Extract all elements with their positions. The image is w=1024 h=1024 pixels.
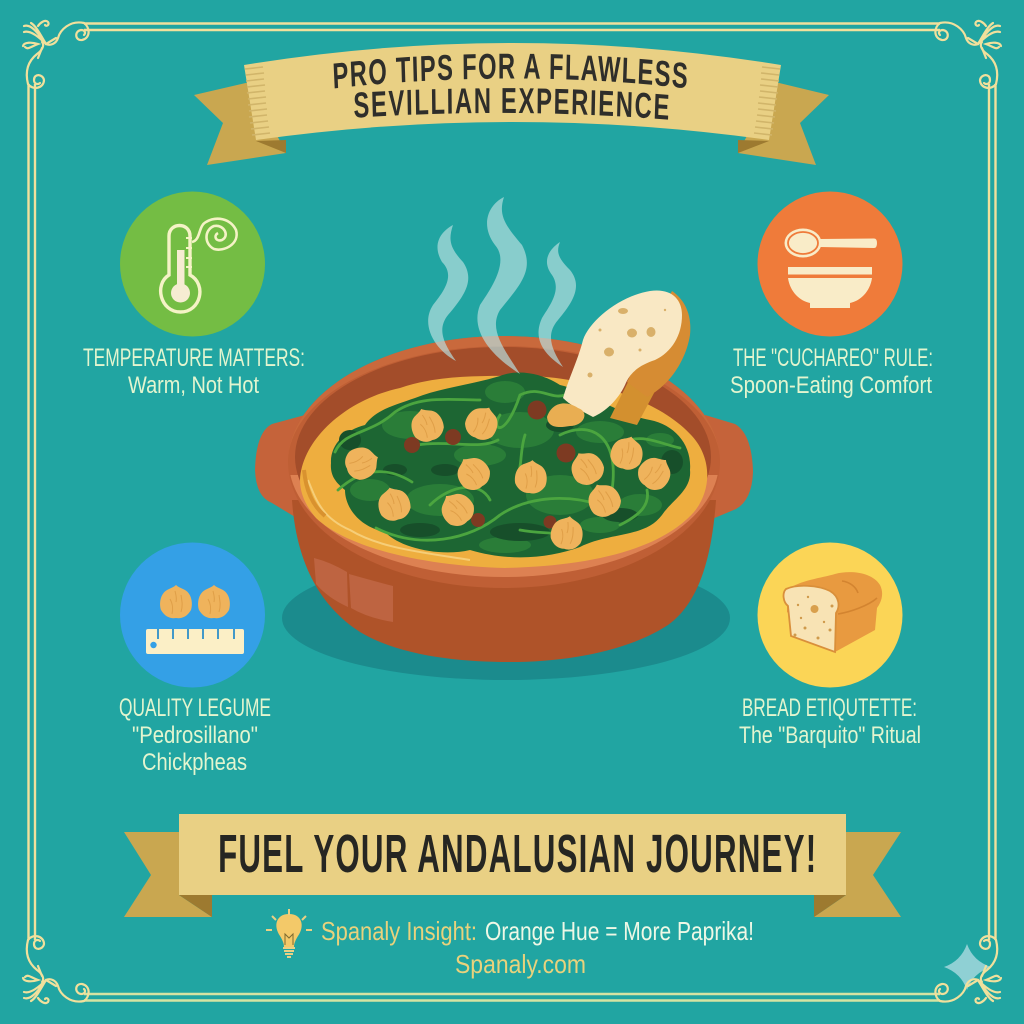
insight text: [321, 916, 754, 979]
bottom ribbon tails: [124, 832, 901, 917]
bottom ribbon body: [179, 814, 846, 895]
tip: quality legume: [119, 542, 271, 776]
bottom ribbon: [124, 814, 901, 917]
sparkle mark: [944, 944, 991, 990]
label: legume: [119, 694, 271, 776]
call to action: FUEL YOUR ANDALUSIAN JOURNEY!: [218, 824, 817, 884]
title text: PRO TIPS FOR A FLAWLESS: [334, 54, 687, 88]
label: bread: The "Barquito" Ritual: [739, 722, 921, 749]
title text: [334, 54, 687, 120]
insight text: Spanaly.com: [455, 949, 586, 979]
ribbon body: [244, 43, 781, 140]
icon: thermometer: [120, 192, 265, 336]
body highlight: [314, 558, 393, 622]
title text: SEVILLIAN EXPERIENCE: [354, 88, 668, 120]
ribbon end stripes: [245, 67, 780, 135]
icon: light bulb: [266, 909, 312, 957]
label: temperature: TEMPERATURE MATTERS:: [83, 344, 305, 372]
label: cuchareo: THE "CUCHAREO" RULE:: [733, 344, 933, 372]
chickpea broth: [300, 376, 707, 568]
steam: [428, 197, 576, 374]
tip: bread etiquette: [739, 542, 921, 749]
dish body: [292, 500, 716, 662]
label: legume: Chickpheas: [142, 749, 247, 776]
central illustration: stew dish: [255, 197, 753, 680]
label: cuchareo: [730, 344, 933, 399]
label: cuchareo: Spoon-Eating Comfort: [730, 372, 932, 399]
icon: spoon and bowl: [758, 192, 902, 336]
dish shadow: [282, 556, 730, 680]
label: bread: BREAD ETIQUTETTE:: [742, 694, 917, 722]
dish inside: [295, 347, 711, 567]
title ribbon: [194, 43, 829, 165]
insight text: Orange Hue = More Paprika!: [485, 916, 754, 946]
spinach: [331, 373, 690, 557]
dipped bread slice: [547, 290, 690, 427]
dish rim: [288, 336, 720, 588]
dish handles: [255, 415, 753, 522]
insight text: Spanaly Insight:: [321, 916, 477, 946]
label: legume: "Pedrosillano": [132, 722, 258, 749]
label: temperature: Warm, Not Hot: [128, 372, 259, 399]
tip: cuchareo: [730, 192, 933, 399]
label: legume: QUALITY LEGUME: [119, 694, 271, 722]
chickpeas: [341, 401, 678, 552]
ribbon tails: [194, 82, 829, 165]
label: bread: [739, 694, 921, 749]
icon: chickpeas and ruler: [120, 542, 265, 688]
icon: bread loaf: [758, 542, 902, 688]
label: temperature: [83, 344, 305, 399]
tip: temperature: [83, 192, 305, 399]
chorizo pieces: [404, 400, 576, 528]
